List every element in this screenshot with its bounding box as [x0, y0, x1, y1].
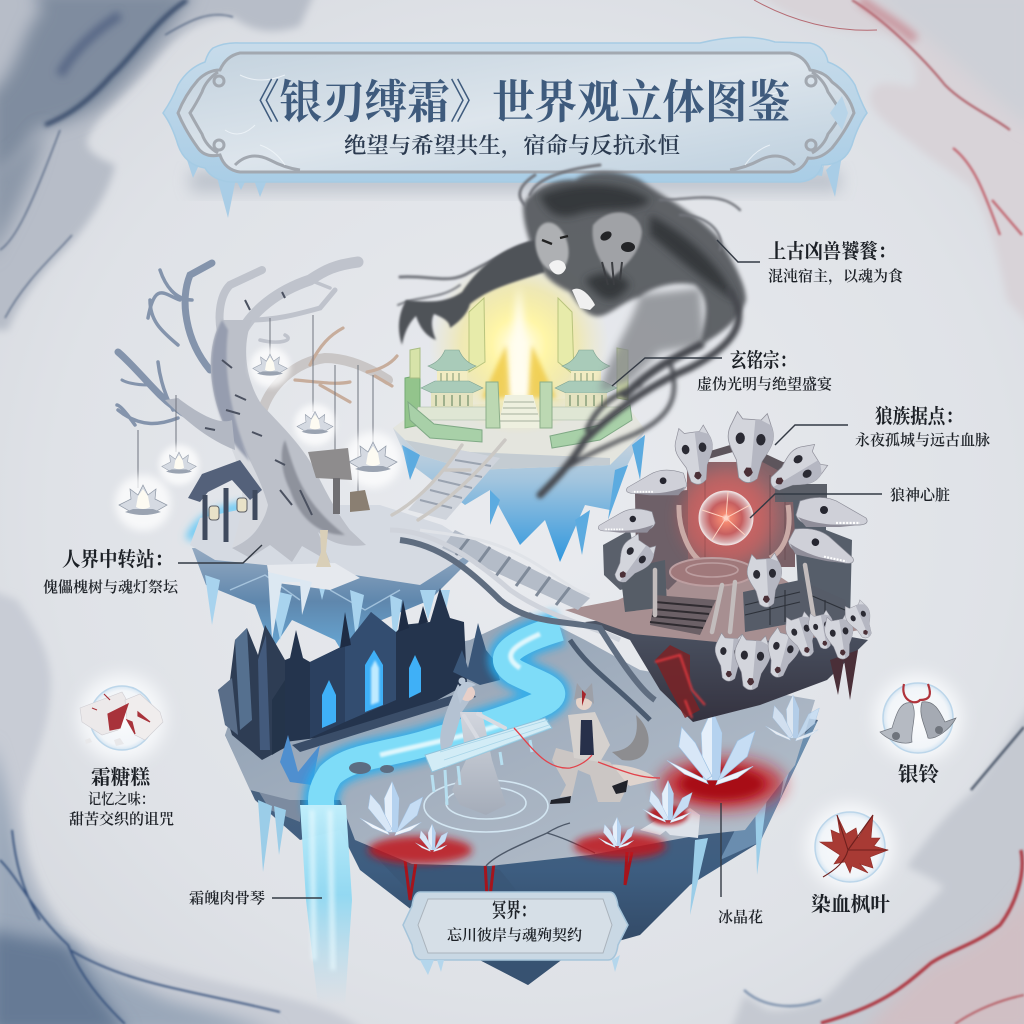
label: frost bone zither: 霜魄肉骨琴 — [189, 890, 265, 907]
lower jaw teeth — [572, 289, 595, 310]
item: frost sugar cake — [69, 674, 174, 828]
label: ice crystal flower: 冰晶花 — [718, 908, 763, 926]
woman with guqin — [425, 678, 552, 815]
bubble — [883, 683, 953, 753]
river stones — [349, 762, 371, 774]
wolf-beast statue — [350, 490, 370, 512]
banner icicles — [187, 155, 842, 218]
branches pale — [220, 262, 358, 345]
left pavilion — [188, 460, 262, 542]
lotus lamps — [115, 475, 171, 531]
glow edge — [190, 505, 255, 540]
label: Taotie: 混沌宿主，以魂为食 — [768, 267, 903, 285]
jade walls — [408, 402, 632, 448]
yellow light — [429, 255, 609, 435]
icicles — [402, 435, 645, 555]
leaf name: 染血枫叶 — [811, 892, 890, 916]
label: wolf clan stronghold — [775, 405, 990, 449]
wall planks — [705, 468, 785, 560]
bubble — [90, 686, 154, 750]
label: Xuanming sect: 虚伪光明与绝望盛宴 — [697, 375, 833, 393]
coat — [568, 712, 610, 762]
root bridge to fortress — [390, 530, 655, 720]
label: Taotie — [717, 240, 903, 285]
banner ice frame — [163, 37, 867, 182]
cake pieces — [80, 692, 129, 735]
bottom-left wash — [0, 590, 367, 1024]
top-right wash — [754, 0, 1024, 330]
head — [459, 685, 475, 701]
wisps — [398, 165, 740, 305]
tusks — [679, 505, 789, 562]
bubble halo — [874, 674, 962, 762]
island surface — [225, 612, 815, 866]
banner shadow — [190, 170, 840, 192]
plaque icicles — [420, 955, 620, 975]
translucent lower body — [600, 288, 705, 392]
blood patches — [660, 758, 784, 810]
item: silver bells — [874, 674, 962, 786]
castle spires — [340, 600, 428, 648]
label: Taotie: 上古凶兽饕餮： — [768, 240, 896, 263]
snow ledge — [640, 808, 700, 838]
label: Xuanming sect — [612, 349, 833, 393]
bubble halo — [78, 674, 166, 762]
tails — [540, 292, 739, 495]
cake name: 霜糖糕 — [91, 766, 152, 789]
right upper block — [775, 484, 827, 502]
left towers — [635, 490, 688, 590]
small stone lantern — [316, 530, 331, 567]
pagoda right — [547, 350, 625, 420]
underside — [192, 535, 470, 668]
dead locust tree — [115, 262, 401, 567]
jade pillars — [405, 375, 420, 428]
legs — [552, 748, 628, 802]
item: frost sugar cake: 甜苦交织的诅咒 — [69, 810, 174, 828]
shadow beast Taotie — [398, 165, 746, 495]
guqin — [425, 718, 552, 772]
kneeling wolf man — [550, 683, 657, 804]
left bell — [880, 703, 914, 743]
label: wolf god heart: 狼神心脏 — [890, 486, 950, 504]
front wall — [743, 580, 850, 632]
waterfall — [300, 805, 352, 1005]
blue crystals near castle — [280, 735, 320, 785]
trunk — [211, 320, 366, 562]
strings — [138, 315, 373, 510]
left face — [530, 219, 574, 275]
surface cracks — [486, 823, 595, 866]
right pavilion — [308, 448, 352, 514]
banner silver plate — [178, 53, 854, 172]
label: human world relay — [43, 545, 262, 596]
back wall — [687, 462, 795, 567]
label: frost bone zither — [189, 890, 322, 907]
floating island: human world relay — [190, 505, 478, 668]
right face — [592, 212, 642, 278]
pagoda left — [413, 350, 491, 420]
frost lines — [225, 75, 790, 165]
right small dark crystals — [453, 623, 500, 685]
left dark crystals — [218, 625, 290, 760]
bottom-right wash — [730, 700, 1024, 1024]
dress — [452, 712, 506, 815]
wolf clan fortress — [565, 411, 879, 722]
banner scroll ornaments — [190, 72, 842, 170]
bell name: 银铃 — [898, 763, 939, 786]
flowing hair — [440, 684, 470, 752]
arms — [464, 714, 505, 742]
stairs with dead branches — [392, 440, 505, 520]
head mass — [523, 172, 746, 345]
cake caption: 记忆之味： — [88, 790, 154, 808]
label: wolf clan stronghold: 永夜孤城与远古血脉 — [855, 431, 990, 449]
island underside — [393, 428, 645, 562]
wolf tail — [612, 715, 649, 761]
label: Xuanming sect: 玄铭宗： — [730, 349, 796, 372]
blood drips — [405, 852, 632, 915]
title banner — [163, 37, 867, 218]
island top — [190, 505, 478, 585]
branches blue-grey left — [117, 263, 233, 437]
icicles — [258, 740, 798, 915]
red ribbon — [903, 684, 930, 702]
leaf — [820, 815, 888, 873]
bubble halo — [806, 803, 894, 891]
subtitle text: 绝望与希望共生，宿命与反抗永恒 — [344, 133, 680, 159]
island underside with red cracks — [585, 610, 868, 722]
red thread — [514, 728, 660, 778]
arm — [399, 240, 545, 345]
plaque caption: 忘川彼岸与魂殉契约 — [447, 926, 582, 944]
altar floor — [670, 558, 754, 586]
label: human world relay: 人界中转站： — [62, 548, 173, 571]
plaque heading: 冥界： — [492, 899, 535, 922]
coat tail — [600, 764, 657, 786]
label: wolf god heart — [750, 486, 950, 518]
icicles — [205, 570, 450, 650]
plaque frame — [403, 892, 628, 960]
island top — [393, 395, 645, 470]
darker mottling — [540, 184, 735, 300]
castle glowing windows — [322, 650, 421, 728]
top-left wash — [0, 0, 320, 330]
island top — [565, 570, 860, 642]
title text: 《银刃缚霜》世界观立体图鉴 — [237, 77, 790, 128]
skulls — [598, 411, 879, 691]
trunk left limb — [165, 398, 235, 450]
label: ice crystal flower — [718, 803, 763, 926]
stairs — [650, 595, 716, 635]
ripples — [424, 780, 548, 832]
label: human world relay: 傀儡槐树与魂灯祭坛 — [43, 578, 179, 596]
head — [576, 694, 592, 710]
bubble — [815, 812, 885, 882]
gothic castle — [285, 588, 476, 752]
ice facets — [230, 575, 400, 610]
castle steps — [292, 690, 476, 752]
item: blood maple leaf — [806, 803, 894, 916]
label: wolf clan stronghold: 狼族据点： — [875, 405, 963, 428]
central stairs — [498, 395, 542, 428]
orb glow — [680, 472, 772, 564]
right towers — [793, 500, 852, 620]
ice crystal flowers — [360, 695, 819, 852]
heart orb — [699, 491, 753, 545]
jade steles — [469, 298, 574, 375]
blood-stained spikes — [830, 650, 858, 700]
floating island: underworld — [218, 588, 819, 1005]
bones — [655, 565, 815, 632]
floating island: Xuanming sect — [393, 255, 645, 562]
underside — [225, 700, 818, 985]
plaque: underworld — [403, 892, 628, 975]
right bell — [921, 702, 956, 738]
bark dashes — [205, 292, 312, 515]
glowing river — [321, 628, 560, 812]
